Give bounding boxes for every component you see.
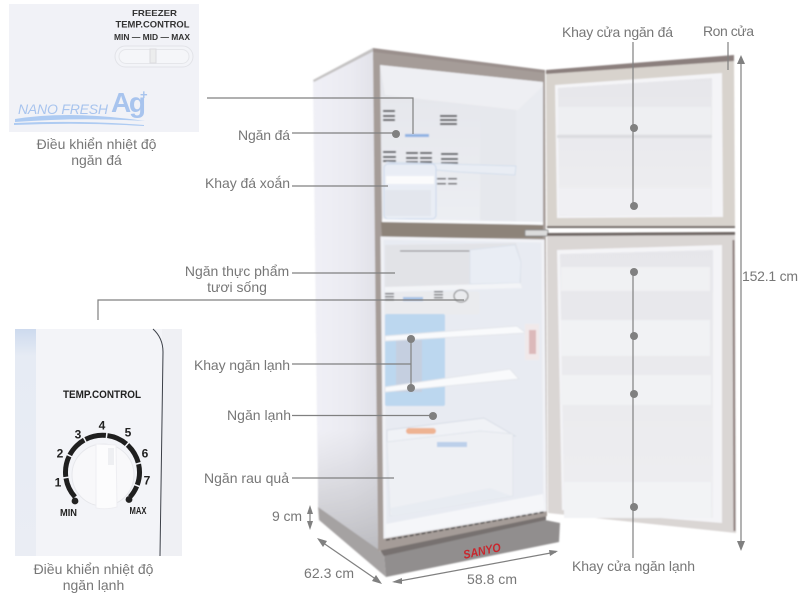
dial labels: 2: [57, 446, 64, 460]
callout: Khay ngăn lạnh: [194, 335, 415, 392]
divider between compartments: [381, 222, 543, 238]
callout: Khay cửa ngăn đá: Khay cửa ngăn đá: [562, 24, 673, 40]
dial knob: [72, 444, 134, 509]
dimension: depth 62.3 cm: [304, 538, 382, 584]
callout: Ron cửa: [703, 23, 754, 70]
ice twist tray: [384, 164, 436, 219]
upper door: [546, 55, 735, 228]
dial labels: MAX: [130, 505, 146, 517]
caption: freezer control: ngăn đá: [71, 152, 122, 168]
dial labels: 4: [99, 418, 106, 432]
cabinet top: [373, 48, 545, 83]
cabinet side: [313, 48, 378, 551]
Nano Fresh Ag+ logo: NANO FRESH: [18, 101, 109, 117]
freezer control label: MIN — MID — MAX: [114, 33, 191, 42]
hinge: [525, 230, 548, 236]
callout: Ngăn đá: Ngăn đá: [238, 127, 290, 143]
callout: fridge control: [98, 300, 464, 320]
callout: Khay ngăn lạnh: Khay ngăn lạnh: [194, 357, 290, 373]
freezer control label: [114, 8, 191, 42]
fridge shelves: [385, 326, 526, 442]
cabinet front frame: [373, 52, 547, 551]
callout: Ron cửa: Ron cửa: [703, 23, 754, 39]
dial scale: [66, 435, 140, 504]
callout: Ngăn thực phẩm tươi sống: tươi sống: [207, 279, 267, 295]
sticker: [525, 324, 539, 360]
freezer slider: [115, 46, 193, 67]
refrigerator: [313, 48, 736, 577]
callout: Ngăn lạnh: Ngăn lạnh: [227, 407, 291, 423]
Nano Fresh Ag+ logo: [14, 87, 148, 126]
callout: Ngăn thực phẩm tươi sống: Ngăn thực phẩm: [185, 263, 289, 279]
callout: Ngăn rau quả: Ngăn rau quả: [204, 470, 289, 486]
freezer control label: TEMP.CONTROL: [116, 20, 190, 30]
dial labels: TEMP.CONTROL: [63, 389, 141, 401]
dial labels: 6: [142, 446, 149, 460]
dial labels: 5: [125, 426, 132, 440]
vegetable drawer: [387, 431, 513, 516]
callout: Ngăn đá: [238, 127, 400, 143]
callout: Khay đá xoắn: Khay đá xoắn: [205, 175, 290, 191]
dimension: plinth 9 cm: 9 cm: [272, 508, 302, 524]
callout: Khay cửa ngăn lạnh: Khay cửa ngăn lạnh: [572, 558, 695, 574]
Nano Fresh Ag+ logo: Ag: [111, 87, 146, 118]
dimension: width 58.8 cm: 58.8 cm: [467, 571, 517, 587]
freezer shelf: [386, 162, 516, 175]
dimension: height 152.1 cm: [737, 55, 798, 551]
callout: Ngăn lạnh: [227, 407, 437, 423]
callout: Ngăn thực phẩm tươi sống: [185, 263, 395, 295]
dial labels: 3: [75, 428, 82, 442]
plinth base: [318, 507, 560, 577]
callout: freezer control: [207, 98, 413, 134]
Sanyo logo: SANYO: [462, 540, 503, 562]
Nano Fresh Ag+ logo: +: [140, 87, 148, 102]
panel: fridge control photo: [15, 329, 182, 556]
bottom dashed gasket: [386, 512, 544, 540]
dimension: height 152.1 cm: 152.1 cm: [742, 268, 798, 284]
dial labels: MIN: [60, 507, 77, 519]
dimension: depth 62.3 cm: 62.3 cm: [304, 565, 354, 581]
dial labels: [55, 389, 151, 519]
panel: freezer control photo: [9, 4, 199, 132]
freezer vents: [383, 110, 458, 184]
lower door: [547, 232, 736, 533]
freezer control label: FREEZER: [132, 8, 177, 18]
dimension: plinth 9 cm: [272, 505, 313, 530]
freezer compartment: [380, 65, 543, 225]
callout: Khay cửa ngăn lạnh: [572, 268, 695, 574]
caption: fridge control: Điều khiển nhiệt độ: [34, 561, 154, 577]
fresh food compartment: [385, 243, 522, 314]
blue back panel: [385, 314, 445, 406]
dial labels: 7: [144, 474, 151, 488]
callout: Khay cửa ngăn đá: [562, 24, 673, 210]
dimension: width 58.8 cm: [392, 550, 558, 587]
caption: fridge control: ngăn lạnh: [63, 577, 124, 593]
fridge compartment: [382, 238, 545, 537]
caption: freezer control: Điều khiển nhiệt độ: [37, 136, 157, 152]
dial labels: 1: [55, 476, 62, 490]
